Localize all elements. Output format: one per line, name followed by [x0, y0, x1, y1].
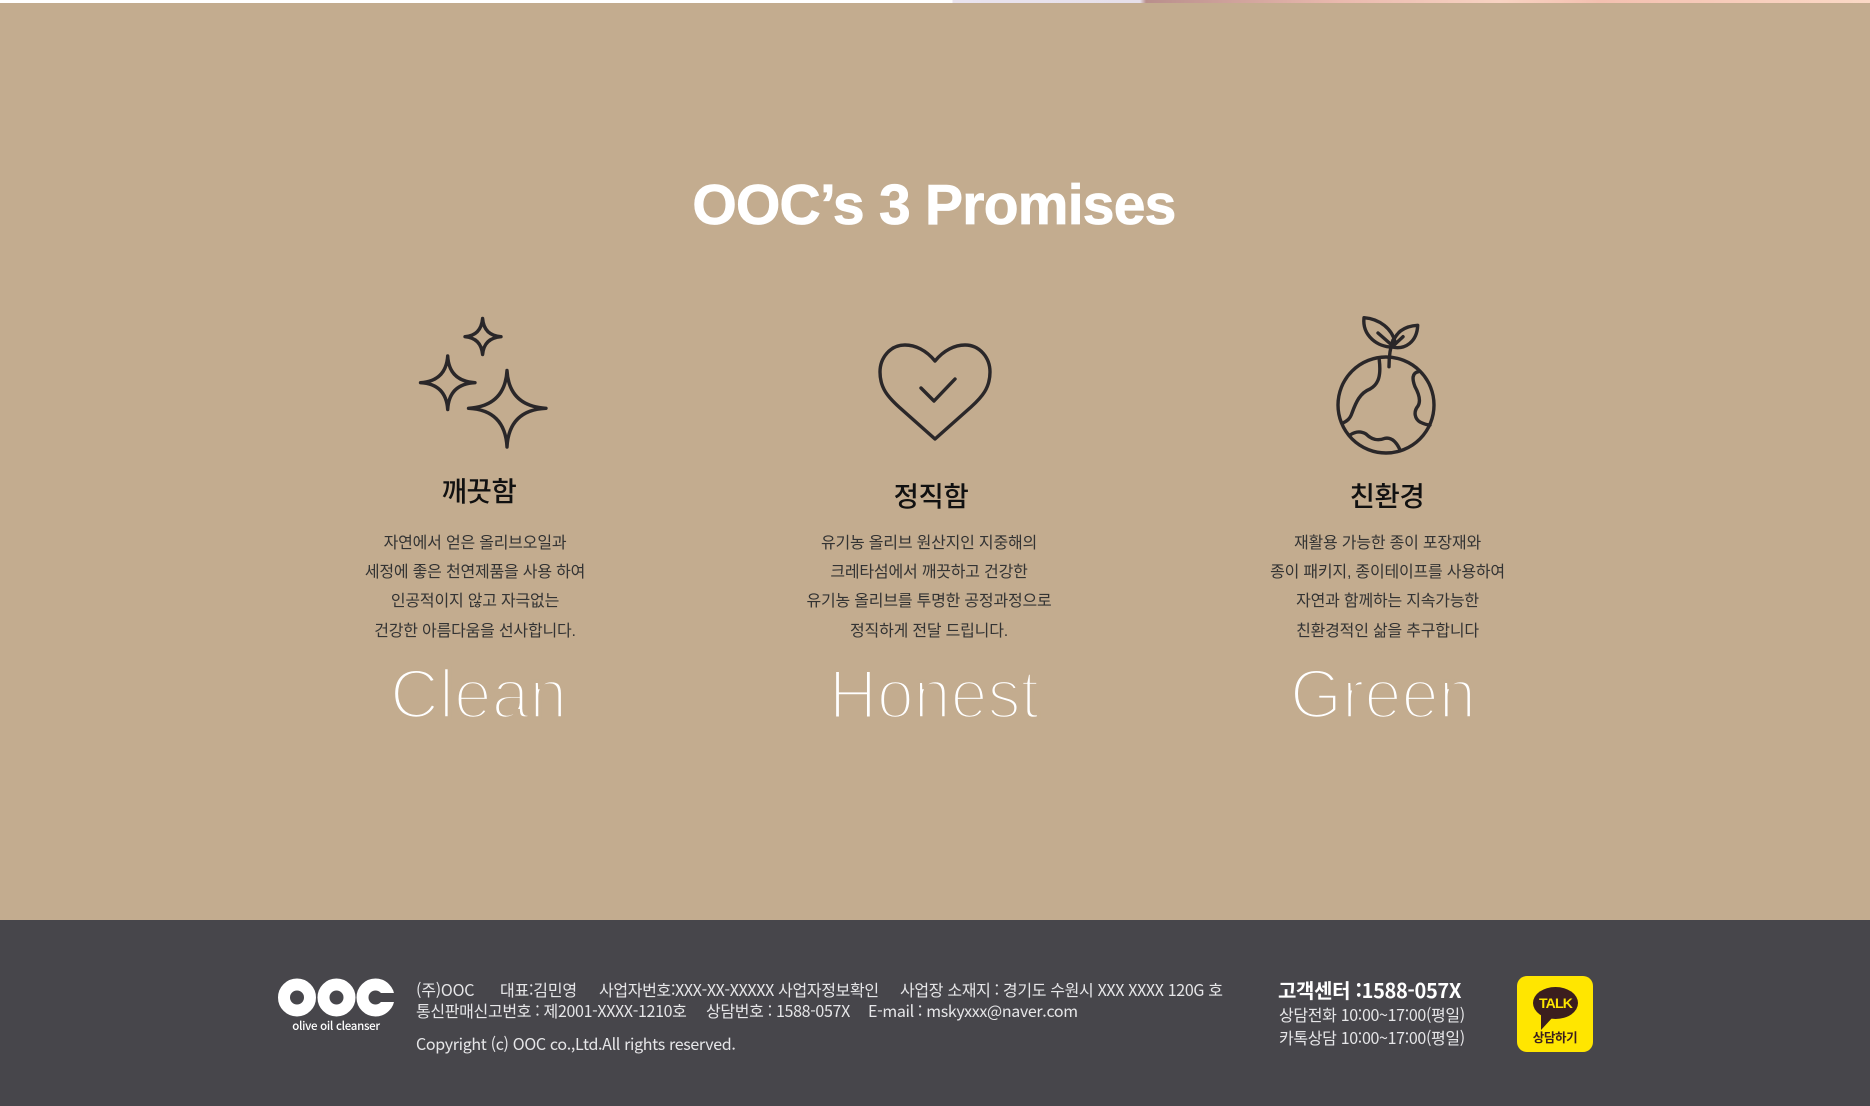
icon: talk bubble	[1533, 987, 1578, 1030]
button: KakaoTalk	[1517, 976, 1593, 1052]
text: clean description: 인공적이지 않고 자극없는	[391, 593, 559, 610]
text: green description: 종이 패키지, 종이테이프를 사용하여	[1270, 564, 1505, 581]
text: honest description	[806, 534, 1052, 640]
footer	[0, 920, 1870, 1106]
title: OOC’s 3 Promises	[692, 173, 1176, 237]
address: 사업장 소재지 : 경기도 수원시 XXX XXXX 120G 호	[900, 977, 1223, 1001]
icon: sparkles	[418, 316, 548, 449]
heading: 정직함: 정직함	[894, 480, 968, 512]
heading: 깨끗함: 깨끗함	[442, 476, 516, 506]
heading: 친환경: 친환경	[1350, 480, 1424, 512]
mail order number: 통신판매신고번호 : 제2001-XXXX-1210호	[416, 998, 687, 1022]
text: green description: 재활용 가능한 종이 포장재와	[1294, 534, 1481, 552]
phone heading: 고객센터 :1588-057X	[1278, 975, 1461, 1004]
logo tagline: olive oil cleanser	[292, 1018, 380, 1034]
top image strip	[0, 0, 1870, 3]
company info	[416, 977, 1223, 1055]
text: clean description: 세정에 좋은 천연제품을 사용 하여	[365, 564, 585, 581]
text: clean description: 자연에서 얻은 올리브오일과	[384, 534, 566, 552]
text: green description: 친환경적인 삶을 추구합니다	[1296, 623, 1479, 640]
icon: heart with check	[878, 343, 992, 441]
business number: 사업자번호:XXX-XX-XXXXX 사업자정보확인	[599, 977, 879, 1001]
logo: OOC	[278, 978, 394, 1034]
text: honest description: 유기농 올리브를 투명한 공정과정으로	[806, 593, 1052, 610]
kakao hours: 카톡상담 10:00~17:00(평일)	[1279, 1025, 1465, 1049]
panel: green	[1270, 316, 1505, 730]
company name: (주)OOC	[416, 977, 474, 1001]
consult number: 상담번호 : 1588-057X	[706, 998, 850, 1022]
text: honest description: 정직하게 전달 드립니다.	[850, 623, 1008, 640]
copyright: Copyright (c) OOC co.,Ltd.All rights reserved.	[416, 1031, 735, 1055]
logo mark	[278, 978, 394, 1016]
panel: clean	[365, 316, 585, 730]
text: honest description: 유기농 올리브 원산지인 지중해의	[821, 534, 1037, 552]
text: clean description	[365, 534, 585, 640]
icon: talk bubble: TALK	[1539, 995, 1573, 1011]
text: green description: 자연과 함께하는 지속가능한	[1296, 593, 1479, 610]
customer center	[1278, 975, 1465, 1049]
email: E-mail : mskyxxx@naver.com	[868, 998, 1078, 1022]
text: clean description: 건강한 아름다움을 선사합니다.	[374, 623, 576, 640]
text: green description	[1270, 534, 1505, 640]
panel: honest	[806, 343, 1052, 730]
representative: 대표:김민영	[500, 977, 577, 1001]
text: honest description: 크레타섬에서 깨끗하고 건강한	[830, 564, 1028, 581]
button label: 상담하기	[1533, 1031, 1577, 1045]
phone hours: 상담전화 10:00~17:00(평일)	[1279, 1002, 1465, 1026]
icon: globe with sprout	[1336, 316, 1436, 455]
